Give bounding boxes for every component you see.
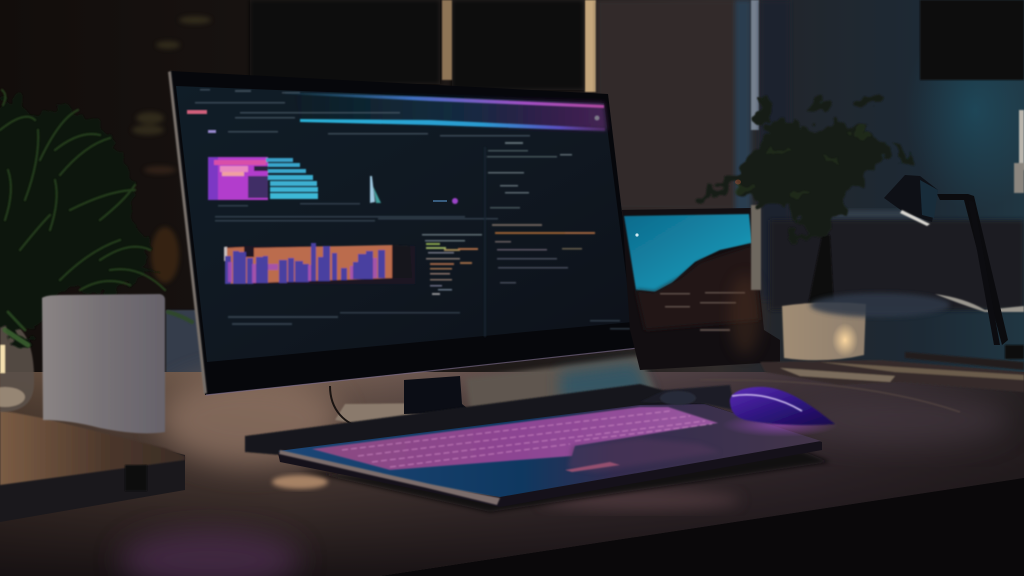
mat under keyboard bbox=[245, 384, 700, 455]
chart: stacked heat bars bbox=[208, 157, 318, 200]
top gradient band bbox=[290, 92, 607, 130]
keys bbox=[312, 407, 718, 470]
trackpad bbox=[568, 438, 720, 472]
chart: spike bbox=[370, 176, 381, 203]
left white pot bbox=[42, 294, 165, 433]
monitor stand bbox=[330, 356, 660, 428]
monitor screen bbox=[176, 86, 632, 362]
desk surface bbox=[0, 372, 1024, 576]
code panel: right bbox=[484, 142, 595, 337]
right plant pot bbox=[782, 302, 866, 360]
purple light beam bbox=[285, 92, 604, 108]
mouse bbox=[640, 385, 838, 437]
papers and books on desk bbox=[700, 345, 1024, 412]
left box on desk bbox=[0, 410, 185, 522]
menu lines bbox=[195, 89, 530, 136]
background wall bbox=[0, 0, 1024, 400]
left glass vase bbox=[0, 320, 34, 412]
cyan light beam bbox=[300, 119, 605, 131]
thin leaves bbox=[0, 90, 192, 345]
left plant bbox=[0, 90, 192, 352]
keyboard laptop bbox=[278, 402, 830, 512]
desk lamp bbox=[810, 175, 1024, 345]
chart: bar skyline bbox=[224, 243, 415, 284]
monitor bbox=[168, 71, 638, 395]
code panel: centre bbox=[422, 234, 482, 295]
background branches behind monitor bbox=[132, 16, 211, 283]
laptop behind bbox=[622, 208, 780, 370]
text lines under top chart bbox=[215, 203, 630, 330]
right plant bbox=[692, 89, 917, 305]
